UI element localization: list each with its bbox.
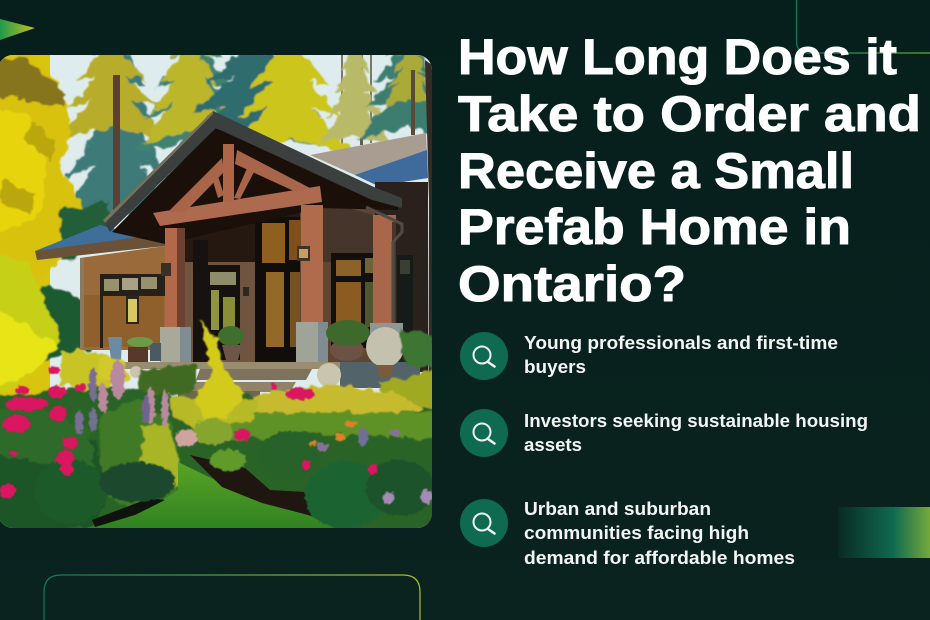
- title: Prefab Home in: [458, 199, 851, 255]
- icon: magnifier: [460, 409, 508, 457]
- left wing window: [100, 274, 165, 348]
- main door and transom: [255, 217, 301, 362]
- outline frame bottom: [44, 575, 420, 620]
- planters and urns: [130, 320, 404, 387]
- text block: buyers: [524, 357, 586, 377]
- right wing dark wall: [375, 182, 428, 372]
- list item: investors: [460, 409, 868, 457]
- porch posts: [165, 205, 402, 328]
- list item: young professionals: [460, 332, 838, 380]
- text block: Urban and suburban: [524, 499, 711, 519]
- left wing wall: [80, 246, 165, 350]
- left backing foliage: [0, 55, 50, 405]
- list item: communities: [460, 499, 795, 568]
- sky: [0, 55, 432, 528]
- text block: assets: [524, 435, 582, 455]
- right porch window: [331, 253, 413, 348]
- decorative triangle top left: [0, 19, 35, 40]
- lawn and mulch bed: [80, 455, 340, 530]
- title: [458, 29, 921, 312]
- icon: magnifier: [460, 499, 508, 547]
- wall lanterns: [161, 246, 310, 296]
- main tree trunks: [113, 70, 415, 210]
- text block: [524, 333, 838, 377]
- gable roof interior: [112, 128, 398, 244]
- flowers: [0, 360, 432, 504]
- dark foliage clumps: [34, 419, 434, 529]
- central porch wall: [300, 208, 375, 362]
- yellow conifers left: [0, 55, 112, 290]
- text block: demand for affordable homes: [524, 548, 795, 568]
- patio chairs: [108, 337, 161, 362]
- tree trunk right: [425, 60, 432, 528]
- title: Ontario?: [458, 256, 686, 312]
- porch steps: [100, 362, 420, 400]
- text block: Young professionals and first-time: [524, 333, 838, 353]
- garden base: [0, 319, 432, 528]
- outline frame top right: [796, 0, 930, 53]
- right roof: [310, 133, 428, 178]
- gradient bar right: [838, 507, 930, 558]
- photo: prefab home in a garden: [0, 55, 432, 528]
- tree trunks far: [341, 55, 372, 145]
- stone pillar bases: [160, 322, 403, 363]
- title: Take to Order and: [458, 86, 921, 142]
- text block: [524, 411, 868, 455]
- text block: Investors seeking sustainable housing: [524, 411, 868, 431]
- timber truss: [153, 144, 322, 226]
- icon: magnifier: [460, 332, 508, 380]
- left roof: [35, 225, 136, 251]
- conifers background: [64, 55, 428, 216]
- text block: [524, 499, 795, 568]
- title: How Long Does it: [458, 29, 897, 85]
- gable roof fascia: [103, 111, 402, 232]
- yellow conifer lower left: [0, 250, 88, 405]
- text block: communities facing high: [524, 523, 749, 543]
- title: Receive a Small: [458, 143, 854, 199]
- left door: [208, 265, 240, 360]
